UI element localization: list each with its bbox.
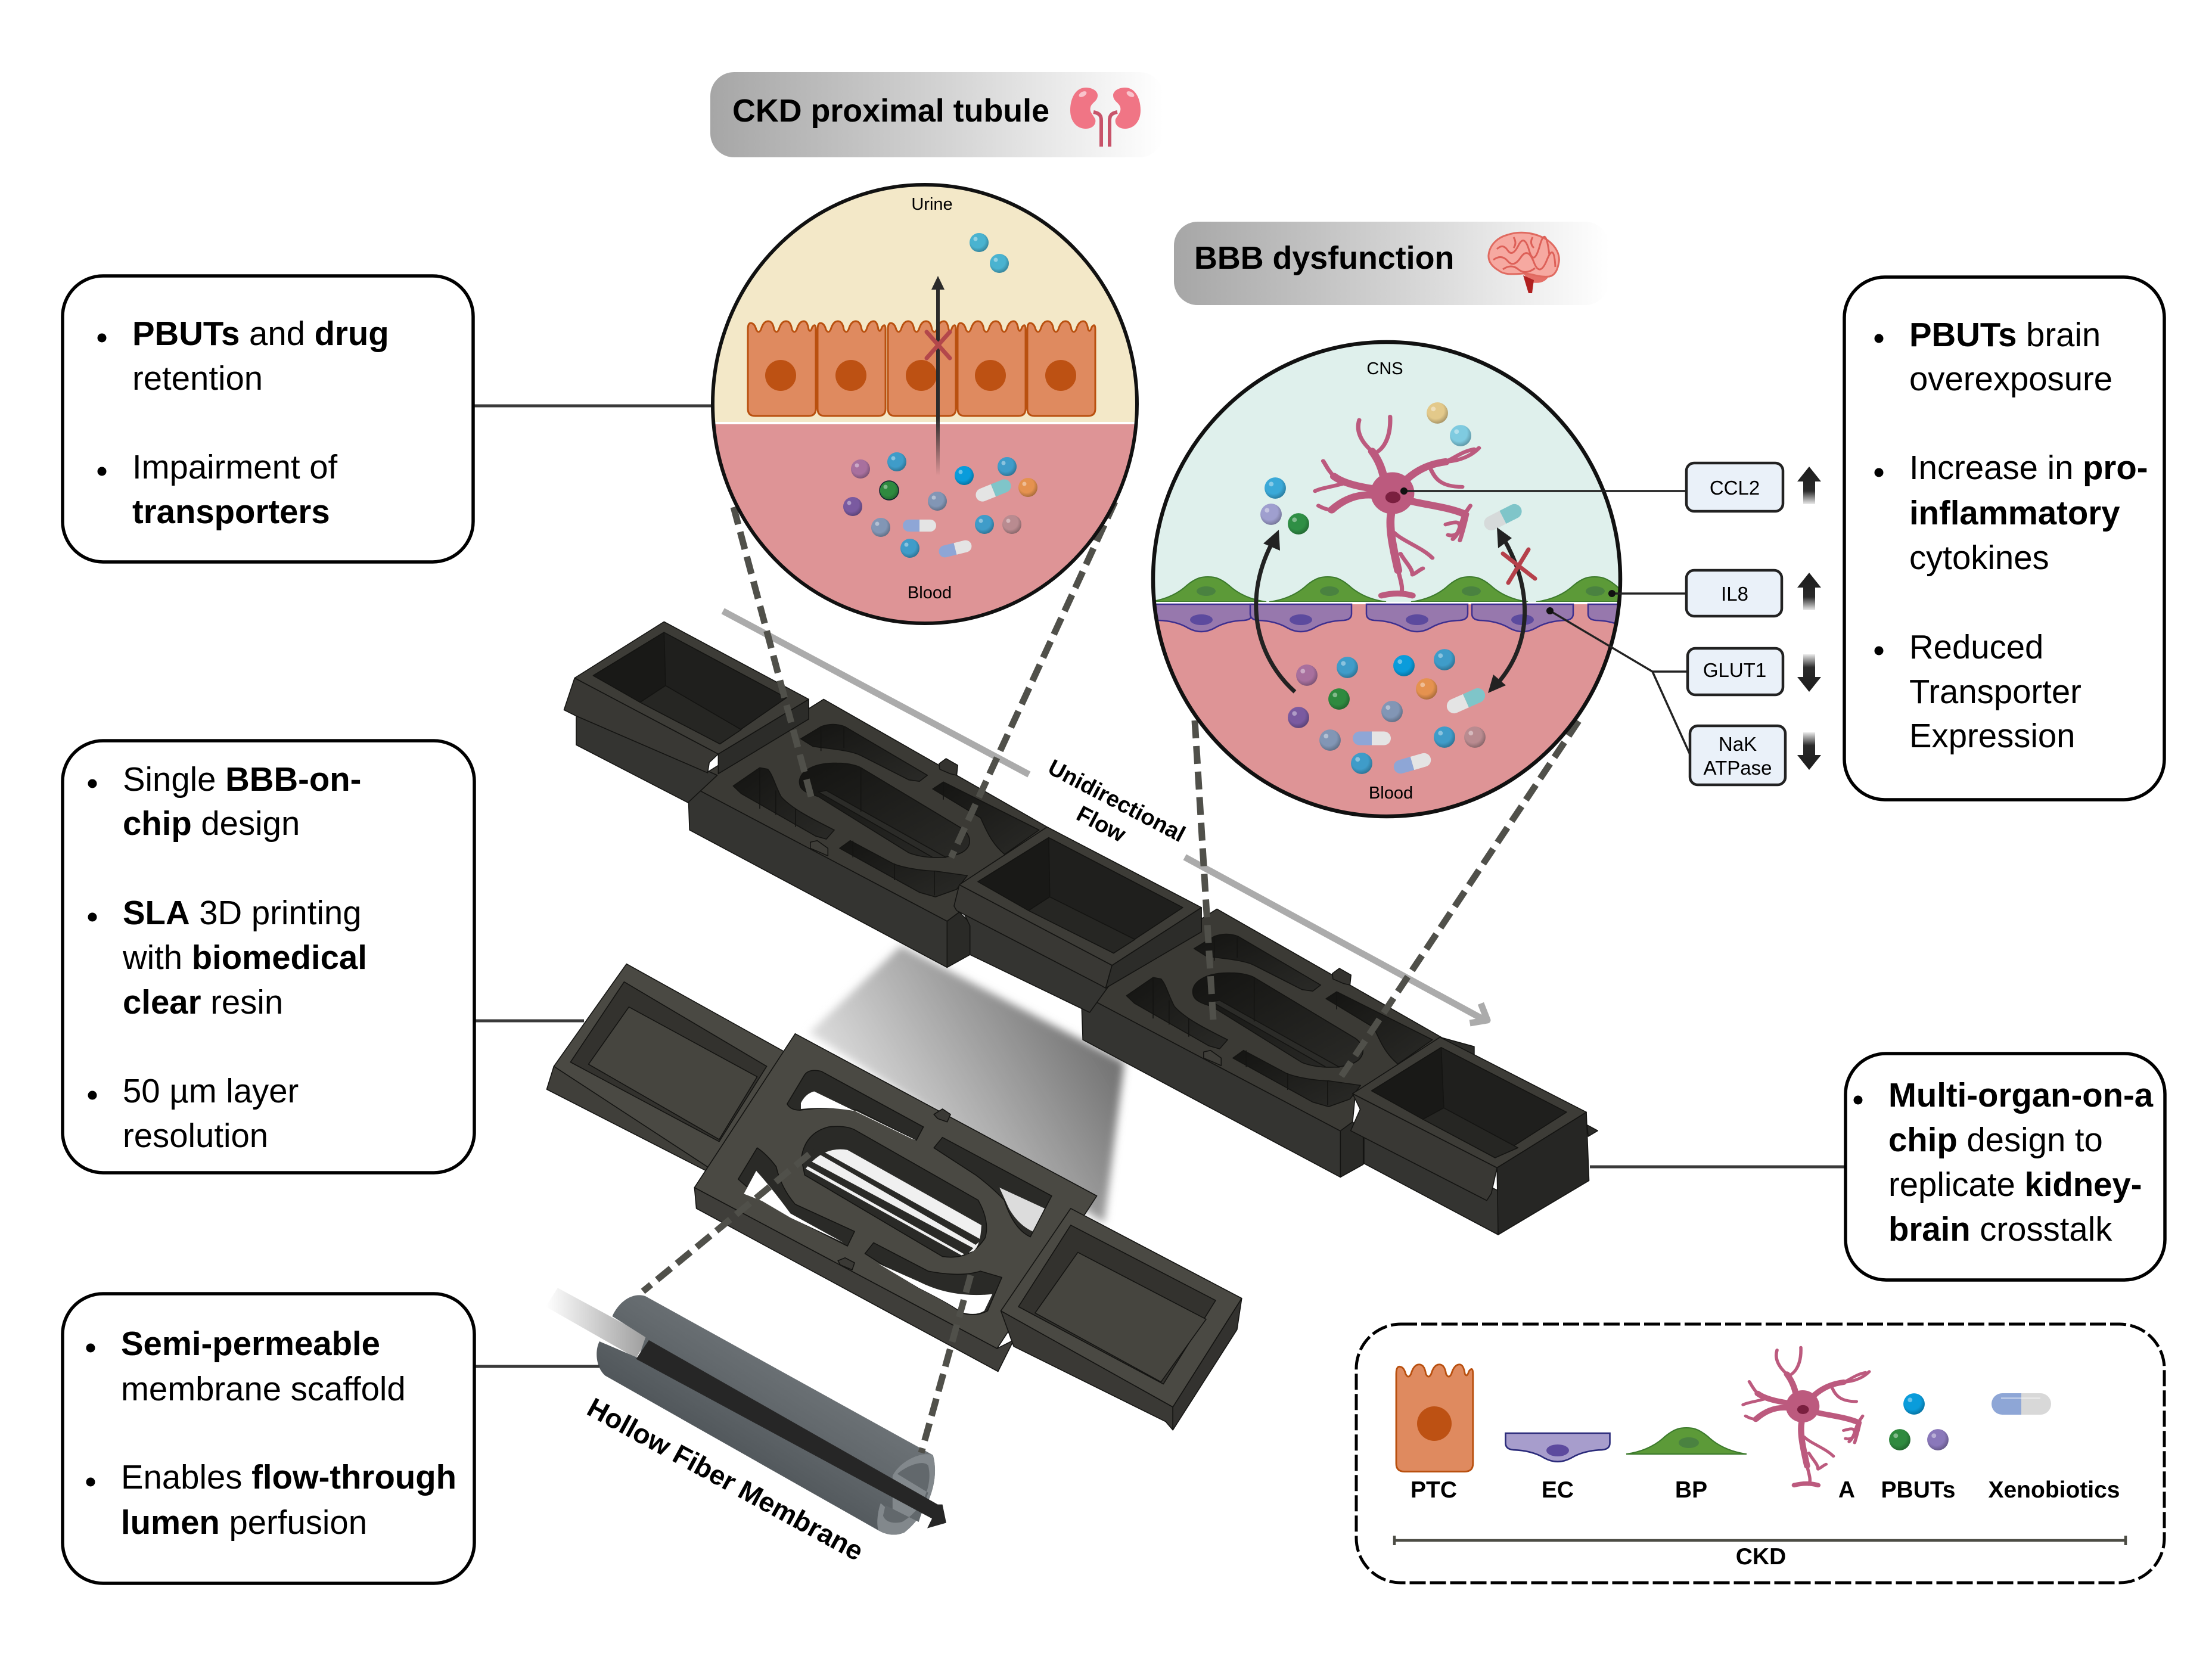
second chamber module of the top chip xyxy=(1081,909,1443,1177)
tube body xyxy=(597,1295,935,1534)
pericyte nuclei xyxy=(1197,586,1605,596)
text box: membrane scaffold xyxy=(63,1294,474,1583)
cell nuclei xyxy=(765,360,1076,391)
chamber plate with openings xyxy=(694,1034,1097,1372)
text box: membrane scaffold: membrane scaffold xyxy=(121,1370,406,1408)
header: BBB dysfunction: BBB dysfunction xyxy=(1194,240,1454,276)
marker: CCL2: CCL2 xyxy=(1710,477,1760,499)
dashed zoom lines xyxy=(643,502,1579,1453)
blocked secretion arrow xyxy=(927,276,950,476)
legend: xenobiotic capsule xyxy=(1992,1393,2051,1415)
text box: multi-organ design: brain crosstalk xyxy=(1888,1210,2112,1248)
marker: GLUT1: GLUT1 xyxy=(1703,659,1766,681)
text box: brain effects: Transporter xyxy=(1909,673,2081,710)
label: CNS: CNS xyxy=(1366,359,1403,378)
text box: brain effects: Expression xyxy=(1909,717,2075,754)
legend: CKD label: CKD xyxy=(1736,1544,1786,1570)
marker: NaK ATPase: NaK xyxy=(1719,733,1757,755)
text box: chip design: Single BBB-on- xyxy=(123,760,361,798)
text box: kidney effects: retention xyxy=(132,359,263,397)
text box: kidney effects xyxy=(63,276,473,562)
text box: brain effects: Increase in pro- xyxy=(1909,449,2148,486)
label: Unidirectional Flow: Flow xyxy=(1073,801,1130,847)
endothelial nuclei xyxy=(1190,614,1534,625)
text box: chip design: 50 µm layer xyxy=(123,1072,299,1110)
chamber modules of the top chip xyxy=(688,699,1050,967)
text box: chip design: resolution xyxy=(123,1117,268,1154)
astrocyte xyxy=(1315,417,1479,595)
brain pericytes xyxy=(1150,577,1653,602)
tube inner wall xyxy=(883,1463,930,1523)
label: Blood (kidney): Blood xyxy=(908,583,952,602)
label: Unidirectional Flow: Unidirectional xyxy=(1044,755,1189,847)
legend: brain pericyte xyxy=(1626,1428,1747,1454)
legend labels xyxy=(1411,1477,2120,1503)
endothelial cells xyxy=(1151,604,1689,632)
text box: membrane scaffold: lumen perfusion xyxy=(121,1503,367,1541)
text box: chip design: with biomedical xyxy=(122,939,367,976)
molecules in BBB circle xyxy=(1260,402,1524,775)
marker: NaK ATPase: ATPase xyxy=(1704,757,1772,779)
legend labels: PTC xyxy=(1411,1477,1457,1503)
text box: brain effects: overexposure xyxy=(1909,360,2112,397)
arrow: GLUT1 down xyxy=(1797,654,1821,692)
text box: chip design xyxy=(63,741,474,1173)
marker leader lines xyxy=(1400,487,1690,754)
legend panel xyxy=(1356,1324,2164,1583)
text box: multi-organ design: chip design to xyxy=(1888,1121,2103,1158)
text box: chip design: chip design xyxy=(123,804,300,842)
transport arrows across barrier xyxy=(1256,527,1535,693)
marker: IL8: IL8 xyxy=(1721,583,1748,605)
central dark rod arrow xyxy=(636,1340,946,1528)
header: BBB dysfunction xyxy=(1174,222,1609,305)
arrow: IL8 up xyxy=(1797,573,1821,610)
marker: IL8 xyxy=(1686,570,1782,616)
text box: kidney effects: Impairment of xyxy=(132,448,338,486)
legend: CKD scale bar xyxy=(1394,1536,2126,1545)
text box: chip design: clear resin xyxy=(123,983,283,1021)
reservoir 1 xyxy=(564,622,809,803)
icon: brain xyxy=(1489,232,1559,293)
legend labels: A xyxy=(1838,1477,1855,1503)
label: Blood (BBB): Blood xyxy=(1369,784,1413,803)
left reservoir xyxy=(546,964,788,1175)
arrow: NaK ATPase down xyxy=(1797,732,1821,770)
text box: multi-organ design: replicate kidney- xyxy=(1888,1166,2142,1203)
text box: membrane scaffold: Semi-permeable xyxy=(121,1325,380,1362)
circle border xyxy=(1153,342,1620,816)
marker: CCL2 xyxy=(1686,463,1783,511)
reservoir 3 xyxy=(1351,1037,1598,1235)
gray projection funnel between chips xyxy=(809,946,1124,1223)
label: Hollow Fiber Membrane: Hollow Fiber Membrane xyxy=(582,1391,869,1567)
bottom exploded chip layer xyxy=(546,964,1242,1430)
marker: GLUT1 xyxy=(1688,648,1783,695)
text box: membrane scaffold: Enables flow-through xyxy=(121,1458,456,1496)
legend labels: Xenobiotics xyxy=(1988,1477,2120,1503)
text box: multi-organ design: Multi-organ-on-a xyxy=(1888,1076,2154,1114)
label: Urine: Urine xyxy=(911,195,953,214)
header: CKD proximal tubule: CKD proximal tubule xyxy=(732,93,1049,129)
header: CKD proximal tubule xyxy=(710,72,1163,157)
legend: endothelial cell xyxy=(1505,1433,1610,1462)
tube end opening xyxy=(877,1454,935,1534)
proximal tubule cells xyxy=(748,321,1095,416)
legend: PTC cell xyxy=(1396,1365,1473,1471)
blood-brain barrier circle xyxy=(1151,340,1622,819)
arrow: CCL2 up xyxy=(1797,467,1821,504)
text box: brain effects: PBUTs brain xyxy=(1909,316,2101,353)
reservoir 2 xyxy=(954,827,1201,1012)
text box: brain effects: inflammatory xyxy=(1909,494,2120,532)
text box: chip design: SLA 3D printing xyxy=(123,894,361,931)
legend labels: BP xyxy=(1675,1477,1707,1503)
flow direction line: upper segment xyxy=(726,613,1026,773)
kidney tubule circle xyxy=(709,182,1141,627)
text box: brain effects xyxy=(1844,277,2164,800)
legend labels: PBUTs xyxy=(1881,1477,1955,1503)
legend labels: EC xyxy=(1542,1477,1574,1503)
marker: NaK ATPase xyxy=(1690,726,1785,785)
molecules in kidney circle xyxy=(843,233,1037,559)
hollow fiber membrane tube xyxy=(546,1288,946,1534)
icon: kidneys xyxy=(1070,88,1141,147)
text box: kidney effects: transporters xyxy=(132,493,330,530)
text box: multi-organ design xyxy=(1846,1054,2165,1280)
text box: brain effects: cytokines xyxy=(1909,539,2049,576)
right reservoir xyxy=(1001,1208,1242,1430)
flow direction arrow: lower segment xyxy=(1188,859,1487,1023)
legend: PBUT molecules xyxy=(1889,1393,1949,1450)
legend: astrocyte xyxy=(1743,1347,1869,1485)
leader lines from text boxes xyxy=(474,406,1845,1366)
top multi-organ chip xyxy=(564,622,1598,1235)
text box: kidney effects: PBUTs and drug xyxy=(132,315,389,352)
inlet light rod xyxy=(546,1288,649,1358)
text box: brain effects: Reduced xyxy=(1909,628,2043,666)
circle border xyxy=(713,185,1137,623)
